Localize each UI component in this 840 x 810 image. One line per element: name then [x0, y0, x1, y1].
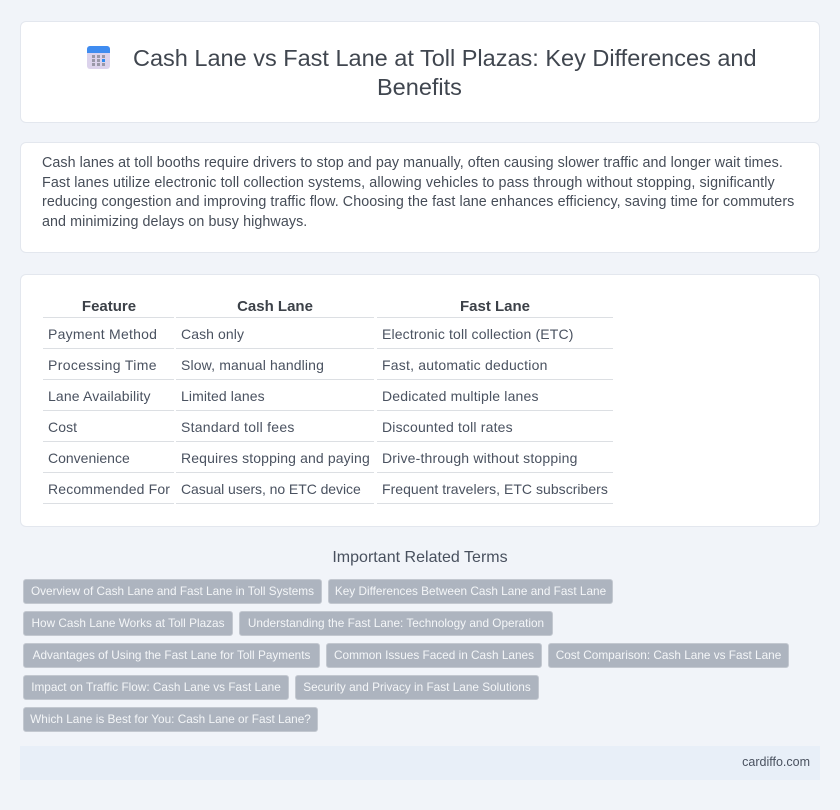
related terms chips: Impact on Traffic Flow: Cash Lane vs Fast Lane	[31, 680, 281, 694]
related terms chips: Understanding the Fast Lane: Technology and Operation	[248, 616, 544, 630]
intro text: Fast lanes utilize electronic toll collection systems, allowing vehicles to pass through without stopping, significantly	[42, 175, 775, 191]
comparison table: Fast Lane	[460, 298, 530, 315]
comparison table: Lane Availability	[48, 388, 151, 404]
comparison table: Electronic toll collection (ETC)	[382, 326, 574, 342]
related terms chips	[23, 579, 789, 732]
comparison table: Casual users, no ETC device	[181, 481, 361, 497]
comparison table: Feature	[82, 298, 136, 315]
related terms chips: Overview of Cash Lane and Fast Lane in Toll Systems	[31, 584, 314, 598]
related terms chips: Which Lane is Best for You: Cash Lane or Fast Lane?	[30, 712, 311, 726]
related terms chips: Security and Privacy in Fast Lane Solutions	[303, 680, 531, 694]
comparison table: Frequent travelers, ETC subscribers	[382, 481, 608, 497]
comparison table: Dedicated multiple lanes	[382, 388, 539, 404]
comparison table: Convenience	[48, 450, 130, 466]
related terms chips: How Cash Lane Works at Toll Plazas	[32, 616, 224, 630]
comparison table: Drive-through without stopping	[382, 450, 578, 466]
related terms chips: Key Differences Between Cash Lane and Fast Lane	[335, 584, 606, 598]
comparison table: Requires stopping and paying	[181, 450, 370, 466]
comparison table: Recommended For	[48, 481, 170, 497]
related terms heading: Important Related Terms	[332, 549, 508, 566]
comparison table: Cost	[48, 419, 77, 435]
comparison table: Discounted toll rates	[382, 419, 513, 435]
comparison table: Cash only	[181, 326, 244, 342]
comparison table: Standard toll fees	[181, 419, 295, 435]
comparison table: Limited lanes	[181, 388, 265, 404]
title card	[20, 21, 820, 123]
intro text panel	[20, 142, 820, 253]
comparison table: Payment Method	[48, 326, 157, 342]
comparison table: Slow, manual handling	[181, 357, 324, 373]
comparison table	[43, 298, 613, 504]
title card: Benefits	[377, 74, 462, 100]
intro text: reducing congestion and improving traffic flow. Choosing the fast lane enhances efficiency, saving time for commuters	[42, 194, 794, 210]
intro text	[42, 155, 794, 230]
intro text: Cash lanes at toll booths require drivers to stop and pay manually, often causing slower traffic and longer wait times.	[42, 155, 783, 171]
icon: calendar	[87, 46, 110, 69]
comparison table panel	[20, 274, 820, 527]
comparison table: Fast, automatic deduction	[382, 357, 548, 373]
comparison table: Cash Lane	[237, 298, 313, 315]
footer	[20, 746, 820, 780]
comparison table: Processing Time	[48, 357, 157, 373]
related terms chips: Cost Comparison: Cash Lane vs Fast Lane	[556, 648, 781, 662]
related terms chips: Advantages of Using the Fast Lane for Toll Payments	[33, 648, 310, 662]
footer source: cardiffo.com	[742, 755, 810, 769]
intro text: and minimizing delays on busy highways.	[42, 214, 307, 230]
related terms chips: Common Issues Faced in Cash Lanes	[334, 648, 534, 662]
title: Cash Lane vs Fast Lane at Toll Plazas: Key Differences and	[133, 45, 757, 71]
